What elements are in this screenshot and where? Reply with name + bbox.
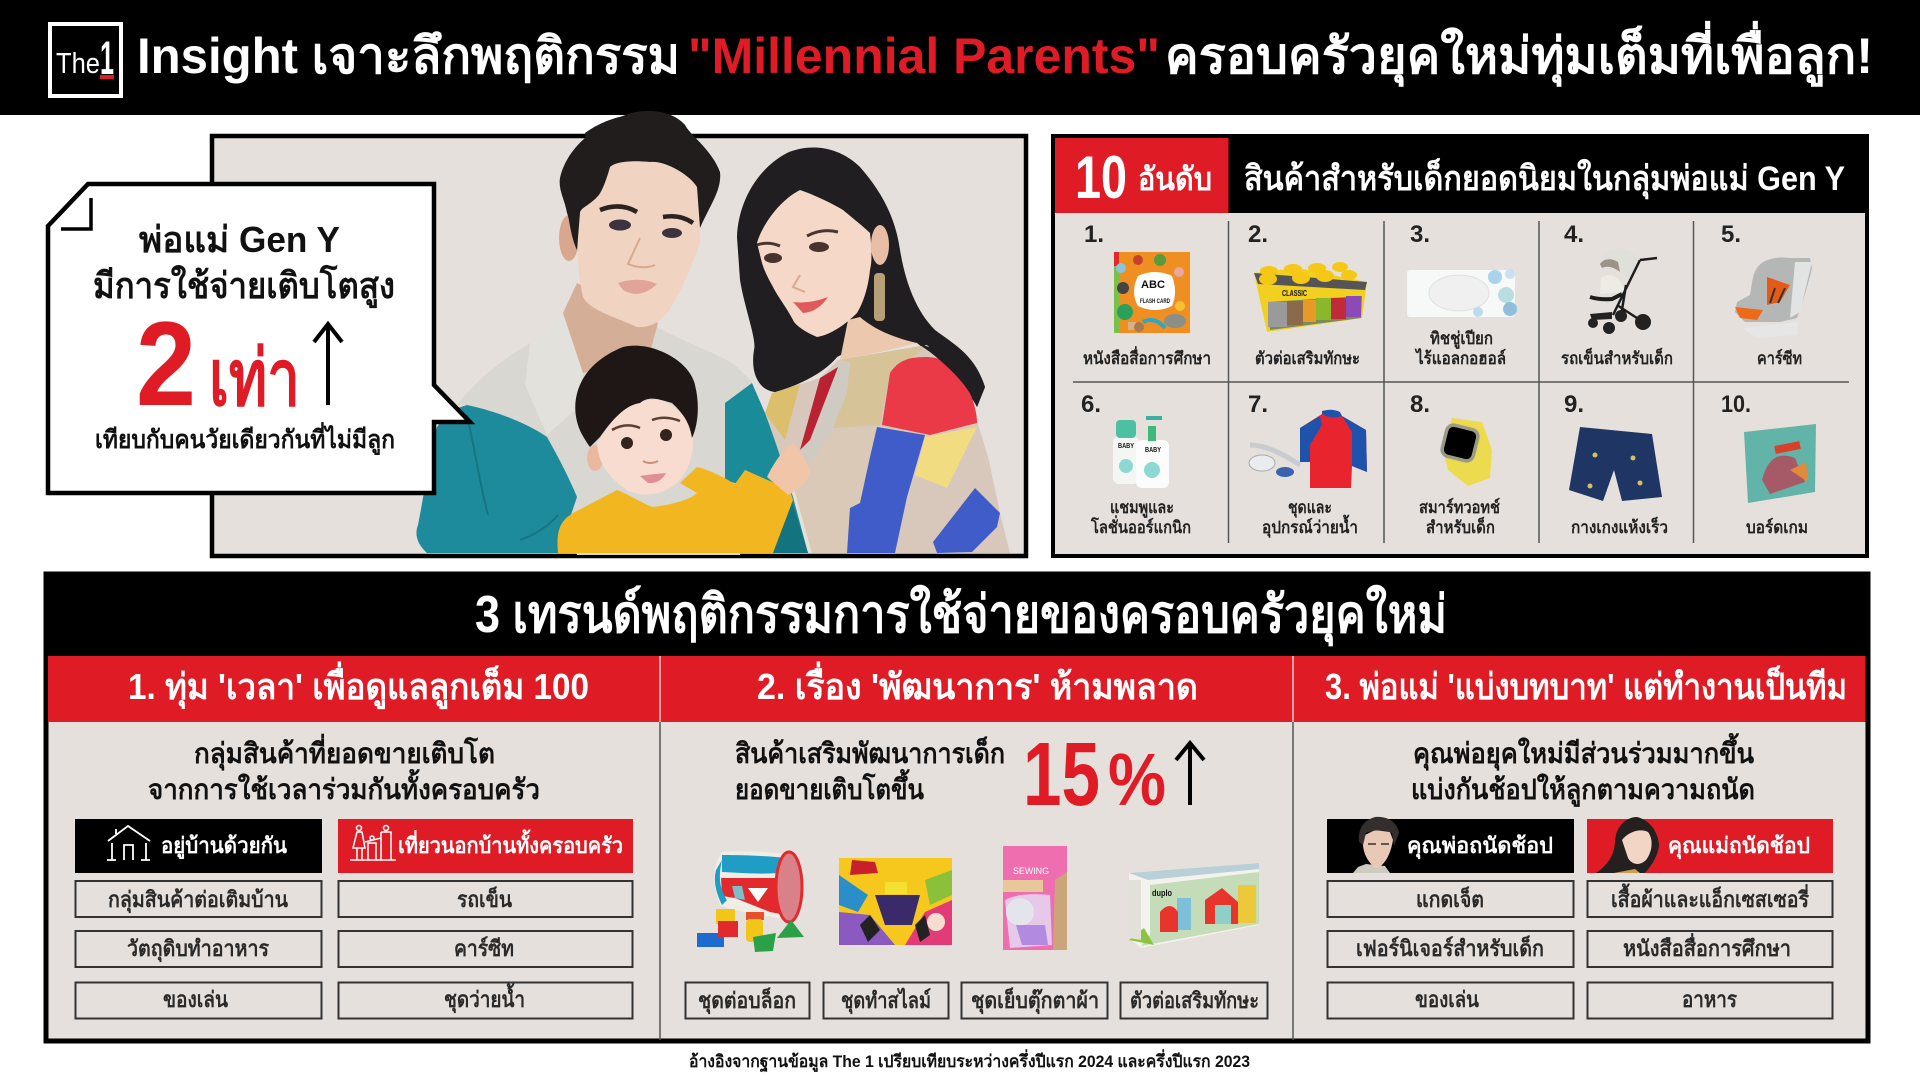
- trend 3: คุณแม่ถนัดช้อป: [1668, 833, 1810, 860]
- child: [558, 346, 810, 553]
- trend 1: คาร์ซีท: [454, 936, 514, 961]
- item 2: [1248, 221, 1367, 368]
- item 4: [1561, 221, 1673, 368]
- title: Insight เจาะลึกพฤติกรรม: [137, 28, 680, 84]
- item 9: 9.: [1564, 391, 1584, 418]
- item 6: โลชั่นออร์แกนิก: [1090, 515, 1191, 537]
- header bar: [0, 0, 1920, 115]
- item 1: 1.: [1084, 221, 1104, 248]
- product: sewing doll box: SEWING: [1013, 866, 1049, 876]
- trend 1: จากการใช้เวลาร่วมกันทั้งครอบครัว: [148, 768, 540, 805]
- trend 2: สินค้าเสริมพัฒนาการเด็ก: [735, 736, 1005, 769]
- trend 1: ของเล่น: [163, 987, 228, 1012]
- item 7: [1248, 391, 1367, 538]
- item 8: 8.: [1410, 391, 1430, 418]
- product: slime kit: [839, 858, 952, 945]
- trend 2: ชุดเย็บตุ๊กตาผ้า: [971, 986, 1099, 1015]
- trend 1: รถเข็น: [457, 885, 512, 912]
- footnote: อ้างอิงจากฐานข้อมูล The 1 เปรียบเทียบระหว่างครึ่งปีแรก 2024 และครึ่งปีแรก 2023: [689, 1049, 1250, 1073]
- item 1: [1083, 221, 1211, 368]
- callout: Gen Y spending: 2: [136, 297, 196, 431]
- heading: อันดับ: [1138, 161, 1212, 197]
- trend 3: [1325, 664, 1847, 1018]
- item 4: รถเข็นสำหรับเด็ก: [1561, 346, 1673, 368]
- trend 1: เที่ยวนอกบ้านทั้งครอบครัว: [398, 829, 623, 858]
- callout: Gen Y spending: [48, 184, 470, 493]
- icon: family: [350, 826, 396, 860]
- item 8: [1410, 391, 1500, 537]
- heading: 3 เทรนด์พฤติกรรมการใช้จ่ายของครอบครัวยุคใหม่: [475, 584, 1447, 647]
- product: duplo box: duplo: [1152, 888, 1172, 898]
- icon: house: [107, 826, 150, 860]
- item 5: [1721, 221, 1812, 368]
- callout: Gen Y spending: เท่า: [209, 334, 300, 422]
- item 9: กางเกงแห้งเร็ว: [1571, 515, 1668, 537]
- stat: 15%: %: [1108, 738, 1166, 821]
- trend 3: เฟอร์นิเจอร์สำหรับเด็ก: [1356, 934, 1544, 961]
- logo: The 1: The: [56, 48, 100, 80]
- stat: 15%: [1023, 725, 1204, 825]
- trend 3: คุณพ่อยุคใหม่มีส่วนร่วมมากขึ้น: [1413, 732, 1754, 771]
- trend 3: คุณพ่อถนัดช้อป: [1407, 833, 1553, 860]
- item 4: 4.: [1564, 221, 1584, 248]
- item 5: คาร์ซีท: [1757, 348, 1802, 368]
- item 6: BABY: [1118, 443, 1134, 450]
- product: shape sorter: [697, 851, 804, 952]
- callout: Gen Y spending: เทียบกับคนวัยเดียวกันที่ไม่มีลูก: [95, 422, 395, 456]
- callout: Gen Y spending: มีการใช้จ่ายเติบโตสูง: [93, 264, 395, 309]
- trend 1: 1. ทุ่ม 'เวลา' เพื่อดูแลลูกเต็ม 100: [128, 661, 589, 710]
- trend 2: ยอดขายเติบโตขึ้น: [735, 768, 924, 805]
- panel: family photo: [212, 111, 1026, 556]
- trend 3: ของเล่น: [1415, 987, 1479, 1012]
- product: duplo box: [1129, 863, 1259, 948]
- stat: 15%: 15: [1023, 725, 1100, 825]
- logo: The 1: [50, 24, 121, 96]
- trend 2: ชุดต่อบล็อก: [698, 986, 796, 1015]
- trend 3: หนังสือสื่อการศึกษา: [1623, 932, 1791, 961]
- panel: 3 trends: [44, 572, 1870, 1041]
- item 3: ทิชชู่เปียก: [1430, 328, 1493, 350]
- item 9: [1564, 391, 1668, 537]
- trend 3: แบ่งกันช้อปให้ลูกตามความถนัด: [1411, 773, 1755, 807]
- trend 2: ตัวต่อเสริมทักษะ: [1130, 988, 1259, 1013]
- trend 1: ชุดว่ายน้ำ: [444, 983, 525, 1014]
- product: sewing doll box: [1003, 846, 1067, 950]
- trend 2: [686, 661, 1268, 1018]
- trend 1: วัตถุดิบทำอาหาร: [127, 936, 269, 963]
- title: "Millennial Parents": [688, 28, 1160, 84]
- trend 3: แกดเจ็ต: [1416, 885, 1484, 912]
- trend 2: ชุดทำสไลม์: [841, 987, 931, 1015]
- item 5: 5.: [1721, 221, 1741, 248]
- trend 3: เสื้อผ้าและแอ็กเซสเซอรี่: [1611, 883, 1809, 912]
- trend 1: [75, 661, 633, 1018]
- item 6: แชมพูและ: [1110, 498, 1174, 519]
- item 1: FLASH CARD: [1140, 299, 1171, 305]
- item 10: [1721, 391, 1816, 537]
- item 1: ABC: [1141, 279, 1165, 291]
- item 1: หนังสือสื่อการศึกษา: [1083, 346, 1211, 368]
- item 7: 7.: [1248, 391, 1268, 418]
- trend 1: กลุ่มสินค้าต่อเติมบ้าน: [108, 887, 288, 914]
- arrow up: [314, 324, 342, 405]
- item 7: อุปกรณ์ว่ายน้ำ: [1262, 514, 1358, 538]
- trend 1: กลุ่มสินค้าที่ยอดขายเติบโต: [194, 733, 495, 771]
- callout: Gen Y spending: พ่อแม่ Gen Y: [139, 219, 340, 260]
- logo: The 1: 1: [100, 31, 114, 84]
- title: [137, 21, 1873, 87]
- item 10: บอร์ดเกม: [1746, 517, 1808, 537]
- item 7: ชุดและ: [1288, 498, 1332, 518]
- item 3: ไร้แอลกอฮอล์: [1414, 348, 1506, 368]
- trend 1: อยู่บ้านด้วยกัน: [161, 833, 287, 860]
- trend 3: 3. พ่อแม่ 'แบ่งบทบาท' แต่ทำงานเป็นทีม: [1325, 664, 1847, 707]
- panel: top 10 products: [1053, 136, 1867, 556]
- item 2: CLASSIC: [1282, 289, 1307, 298]
- woman: [737, 148, 1010, 553]
- item 3: 3.: [1410, 221, 1430, 248]
- trend 2: 2. เรื่อง 'พัฒนาการ' ห้ามพลาด: [757, 661, 1198, 707]
- portrait: mother: [1596, 817, 1659, 873]
- trend 3: อาหาร: [1682, 987, 1737, 1012]
- man: [416, 111, 808, 555]
- item 6: 6.: [1081, 391, 1101, 418]
- item 8: สมาร์ทวอทช์: [1419, 497, 1500, 517]
- item 10: 10.: [1721, 391, 1751, 418]
- item 8: สำหรับเด็ก: [1426, 515, 1495, 537]
- item 6: [1081, 391, 1191, 537]
- item 3: [1407, 221, 1517, 368]
- man's hair over header: [585, 111, 690, 137]
- item 2: 2.: [1248, 221, 1268, 248]
- portrait: father: [1353, 817, 1399, 873]
- item 2: ตัวต่อเสริมทักษะ: [1255, 349, 1360, 368]
- title: ครอบครัวยุคใหม่ทุ่มเต็มที่เพื่อลูก!: [1165, 21, 1873, 87]
- item 6: BABY: [1145, 447, 1161, 454]
- heading: 10: [1075, 144, 1127, 211]
- heading: สินค้าสำหรับเด็กยอดนิยมในกลุ่มพ่อแม่ Gen Y: [1244, 157, 1845, 200]
- heading: [1075, 144, 1845, 211]
